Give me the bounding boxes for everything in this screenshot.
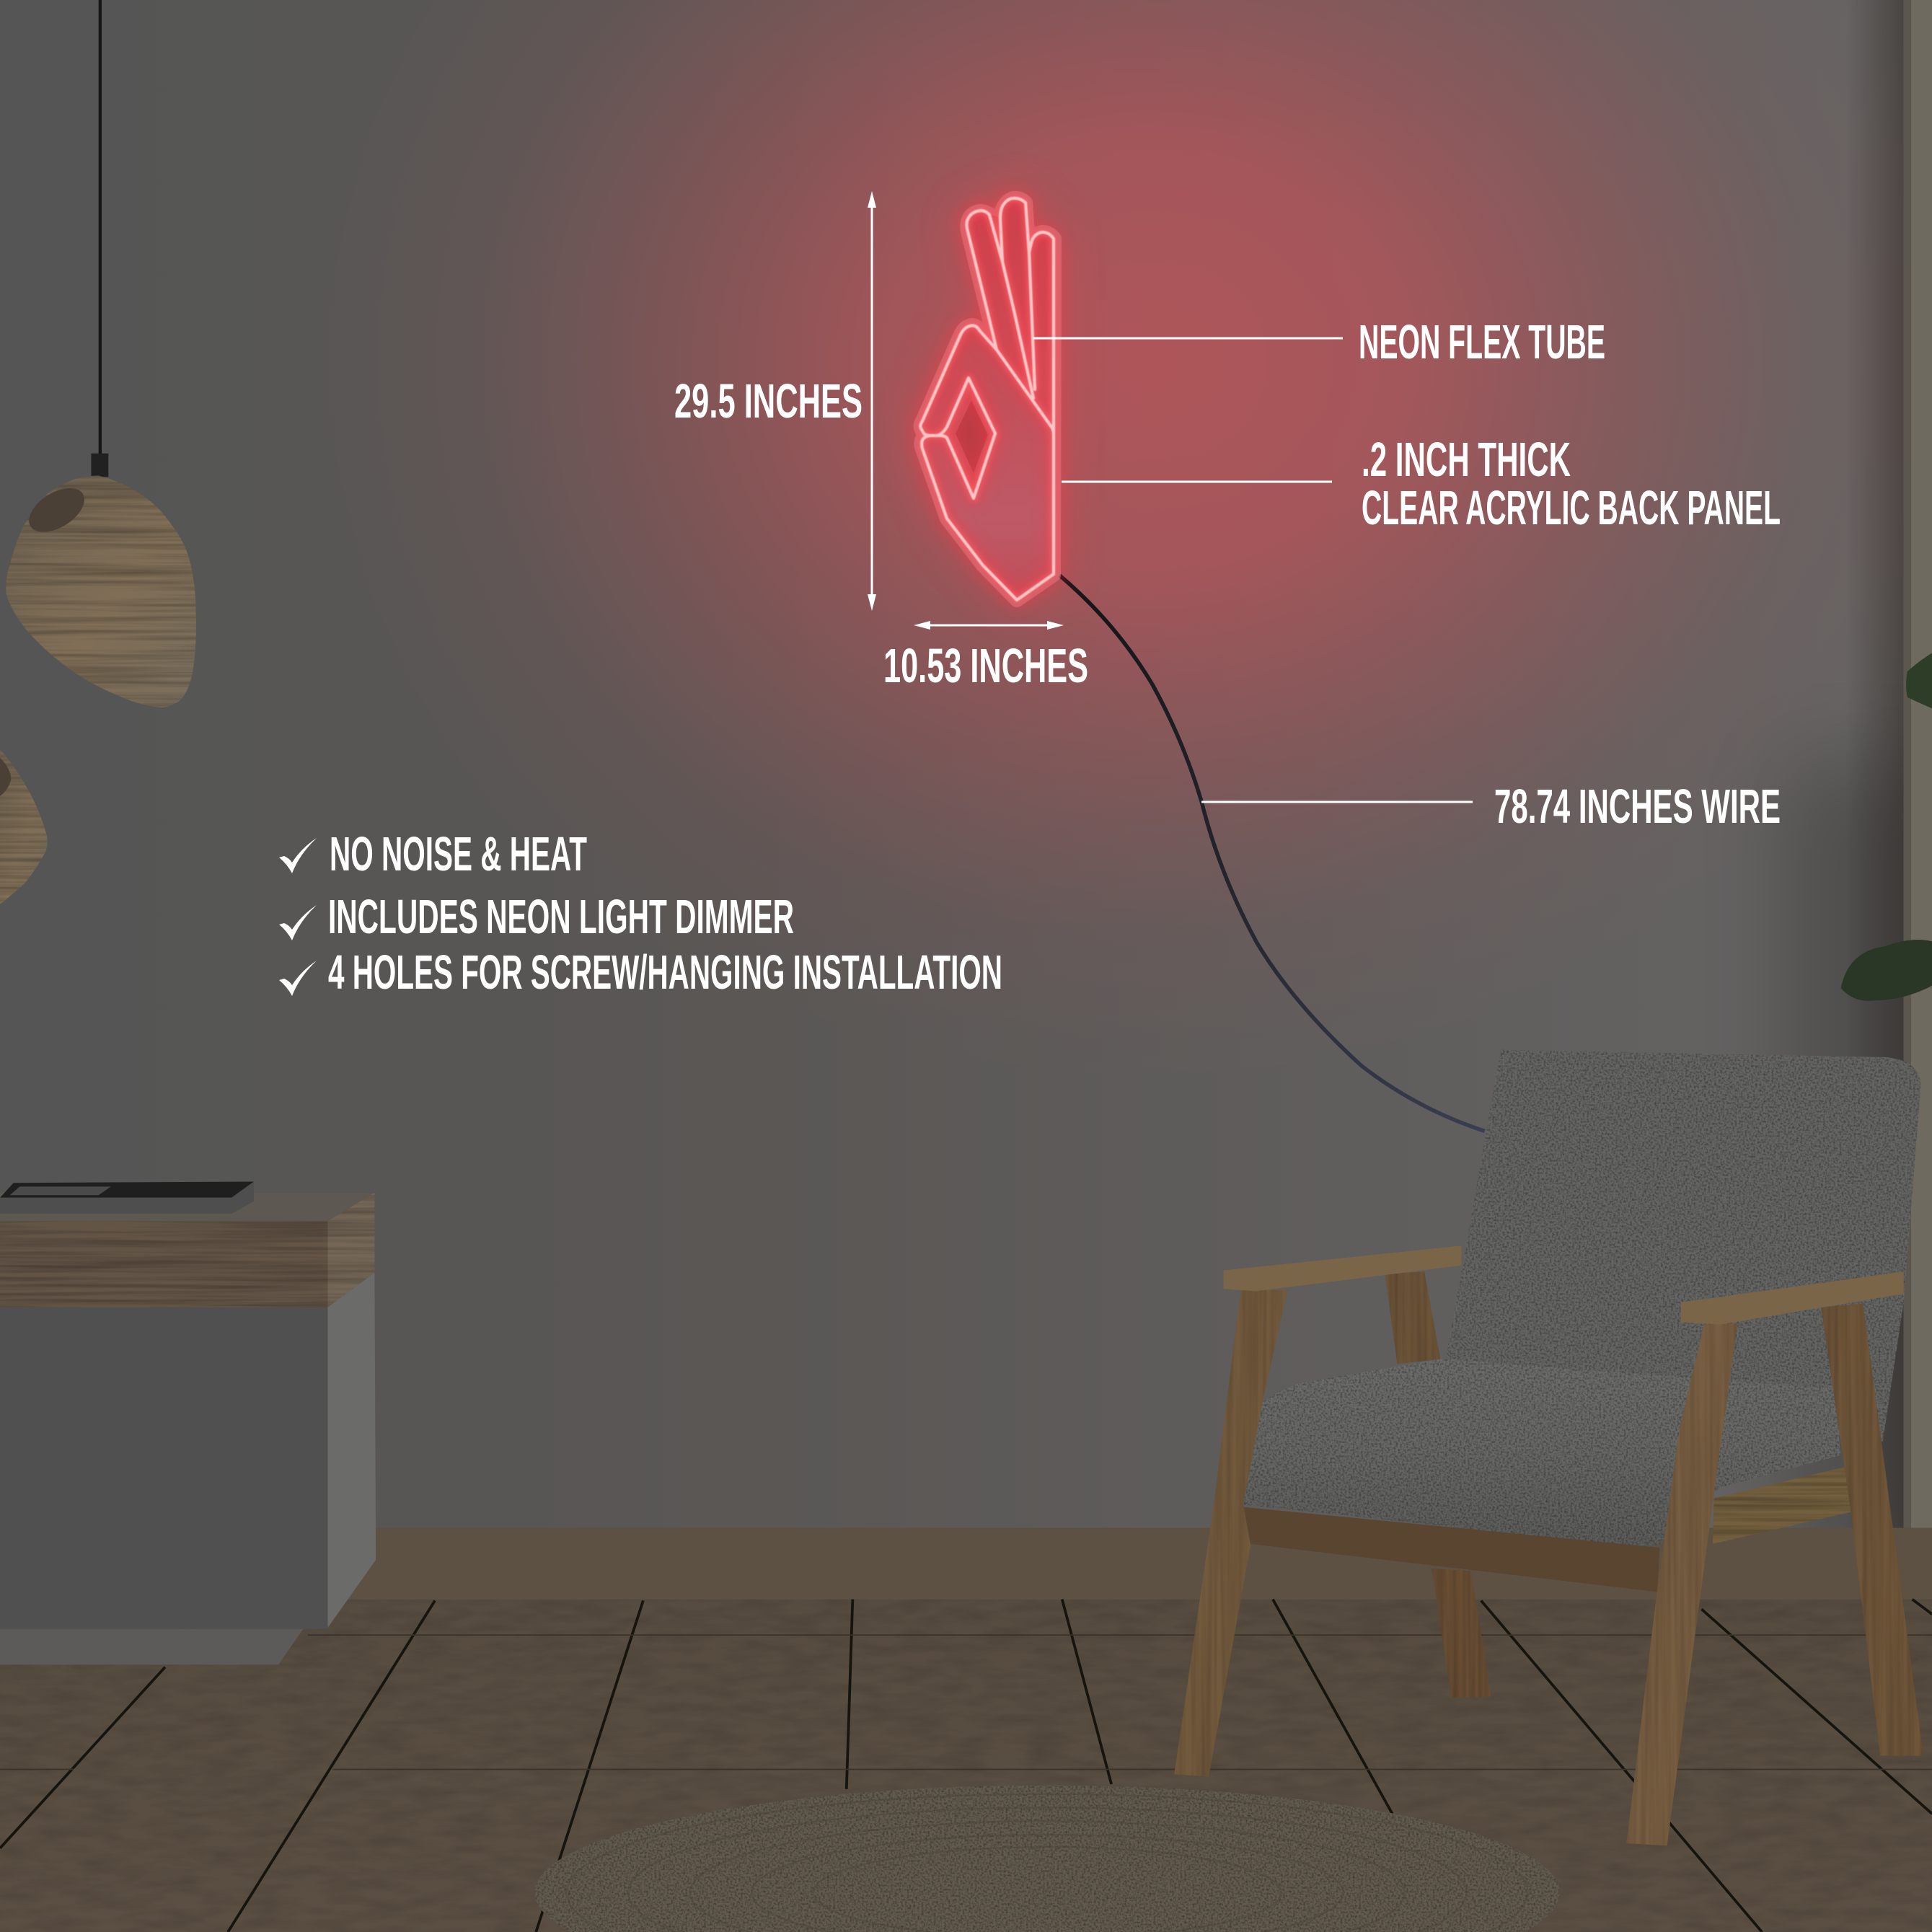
leader line: wire bbox=[1201, 800, 1473, 803]
clear acrylic back panel bbox=[921, 198, 1054, 600]
chair back cushion bbox=[1447, 1050, 1921, 1442]
floor bbox=[0, 1600, 1932, 1932]
soft shadow on wall near column bbox=[1788, 764, 1932, 1587]
feature: holes: 4 HOLES FOR SCREW/HANGING INSTALLATION bbox=[328, 945, 1002, 1000]
label: width: 10.53 INCHES bbox=[883, 639, 1088, 693]
wooden column on right bbox=[1904, 0, 1932, 1528]
hand body fill bbox=[921, 198, 1054, 600]
baseboard bbox=[351, 1528, 1932, 1600]
feature list bbox=[279, 827, 1002, 1000]
diamond opening bbox=[947, 378, 995, 498]
label: acrylic thickness bbox=[1362, 433, 1781, 535]
height arrow bbox=[868, 191, 876, 611]
pendant lamp small bbox=[0, 749, 47, 904]
round jute rug bbox=[535, 1786, 1560, 1932]
armchair bbox=[1174, 1050, 1923, 1845]
plant leaves bbox=[1841, 653, 1932, 1001]
neon flex tube bbox=[920, 198, 1054, 600]
label: height: 29.5 INCHES bbox=[674, 374, 863, 428]
feature: dimmer: INCLUDES NEON LIGHT DIMMER bbox=[328, 890, 794, 944]
side cabinet bbox=[0, 1193, 376, 1664]
chair seat rail bbox=[1240, 1507, 1659, 1592]
feature: dimmer bbox=[279, 890, 794, 944]
chair right arm and legs bbox=[1626, 1271, 1923, 1845]
width arrow bbox=[914, 621, 1064, 630]
leader line: back panel bbox=[1062, 480, 1332, 483]
tube wide glow bbox=[920, 198, 1054, 600]
chair side rail bbox=[1713, 1461, 1873, 1544]
tube tight glow bbox=[920, 198, 1054, 600]
feature: holes bbox=[279, 945, 1002, 1000]
pendant lamp large bbox=[6, 0, 196, 707]
label: neon flex tube: NEON FLEX TUBE bbox=[1359, 315, 1605, 369]
neon hand sign bbox=[920, 198, 1054, 600]
leader line: neon flex tube bbox=[1033, 338, 1343, 339]
book on cabinet bbox=[0, 1181, 254, 1214]
chair seat cushion bbox=[1233, 1359, 1841, 1548]
feature: no noise and heat bbox=[279, 827, 587, 881]
outer red halo bbox=[921, 198, 1054, 600]
label: acrylic thickness: .2 INCH THICK bbox=[1362, 433, 1571, 487]
chair left arm and leg bbox=[1174, 1245, 1461, 1777]
power wire bbox=[1059, 575, 1485, 1131]
feature: no noise and heat: NO NOISE & HEAT bbox=[330, 827, 587, 881]
chair back legs bbox=[1385, 1271, 1491, 1698]
